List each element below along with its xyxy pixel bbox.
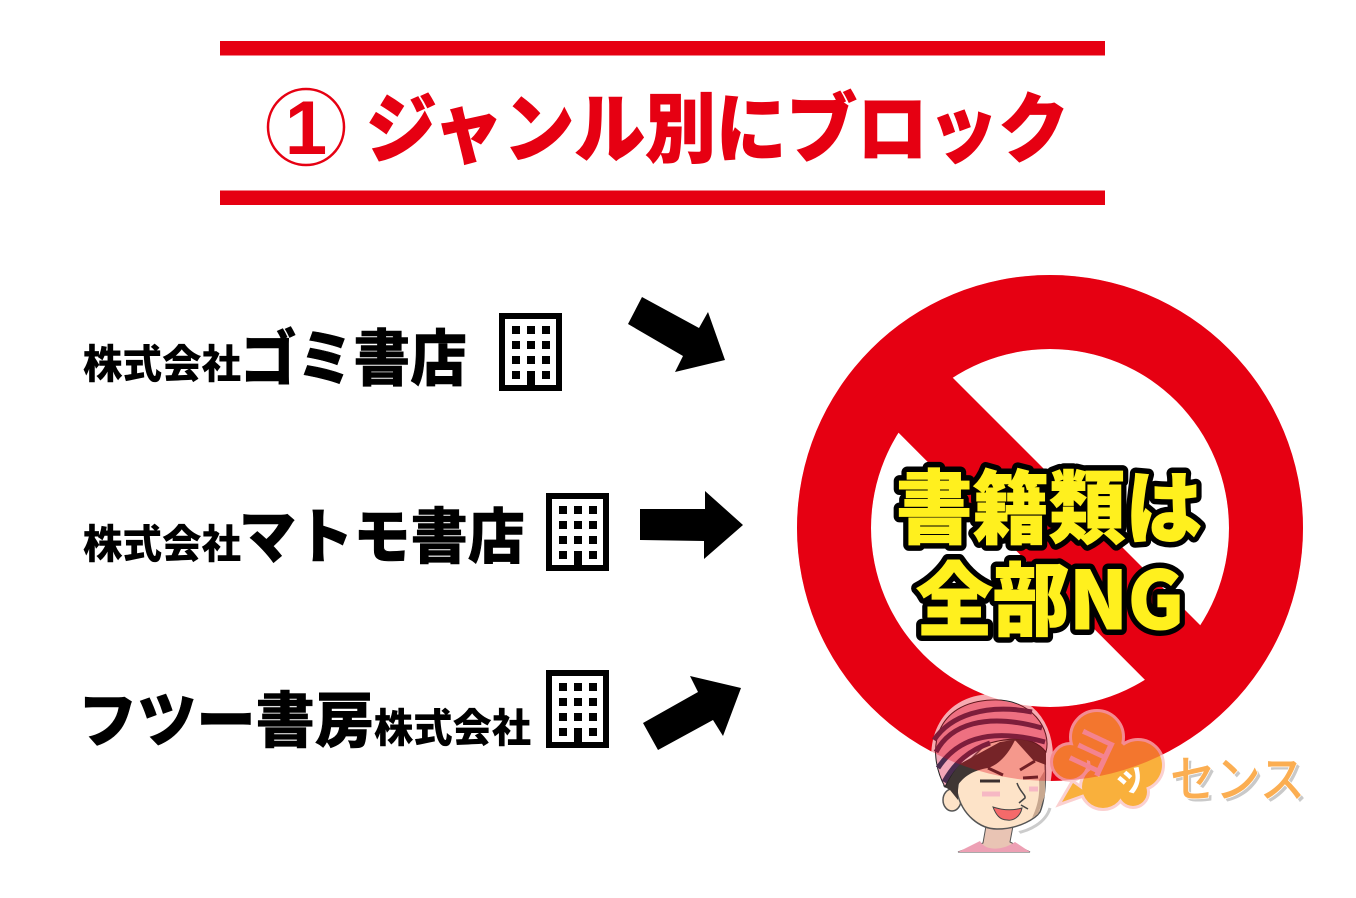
company row 1: 株式会社 xyxy=(83,332,241,390)
company row 2 xyxy=(83,489,606,576)
ring tint over mascot xyxy=(797,275,1303,781)
logo text: ヨ xyxy=(1055,706,1131,792)
title number: 1 xyxy=(285,86,327,171)
prohibition sign xyxy=(797,275,1303,781)
company row 2: 株式会社 xyxy=(83,512,241,570)
hair xyxy=(943,735,1046,800)
icon: building 3 xyxy=(549,673,606,746)
company row 3: フツー書房 xyxy=(78,673,374,760)
logo cloud: ッ xyxy=(1102,746,1155,805)
arrow 2 xyxy=(640,491,743,559)
company row 3: 株式会社 xyxy=(374,696,531,754)
title number xyxy=(268,86,344,171)
callout: all books NG: 全部NG xyxy=(916,537,1184,653)
icon: building 1 xyxy=(502,316,559,389)
title band xyxy=(220,41,1105,205)
company row 2: マトモ書店 xyxy=(239,489,525,576)
logo wordmark: センス xyxy=(1173,743,1308,815)
callout: all books NG: 書籍類は xyxy=(896,445,1202,561)
arrow 1 xyxy=(628,297,725,372)
company row 3 xyxy=(78,673,606,760)
mascot and logo xyxy=(933,696,1308,853)
eyes, cheeks and mouth xyxy=(980,761,1038,781)
callout: all books NG xyxy=(896,445,1202,653)
logo wordmark: センス xyxy=(1170,740,1305,812)
cap xyxy=(936,700,1047,787)
icon: building 2 xyxy=(549,496,606,569)
title text: ジャンル別にブロック xyxy=(366,68,1069,178)
logo cloud xyxy=(1053,706,1162,808)
neck and shirt xyxy=(958,826,1030,852)
callout: all books NG: 書籍類は xyxy=(896,445,1202,561)
face xyxy=(957,740,1045,829)
company row 1 xyxy=(83,309,559,398)
mascot xyxy=(933,696,1051,853)
arrow 3 xyxy=(643,676,741,750)
callout: all books NG: 全部NG xyxy=(916,537,1184,653)
company row 1: ゴミ書店 xyxy=(240,309,467,398)
ear xyxy=(943,789,961,811)
